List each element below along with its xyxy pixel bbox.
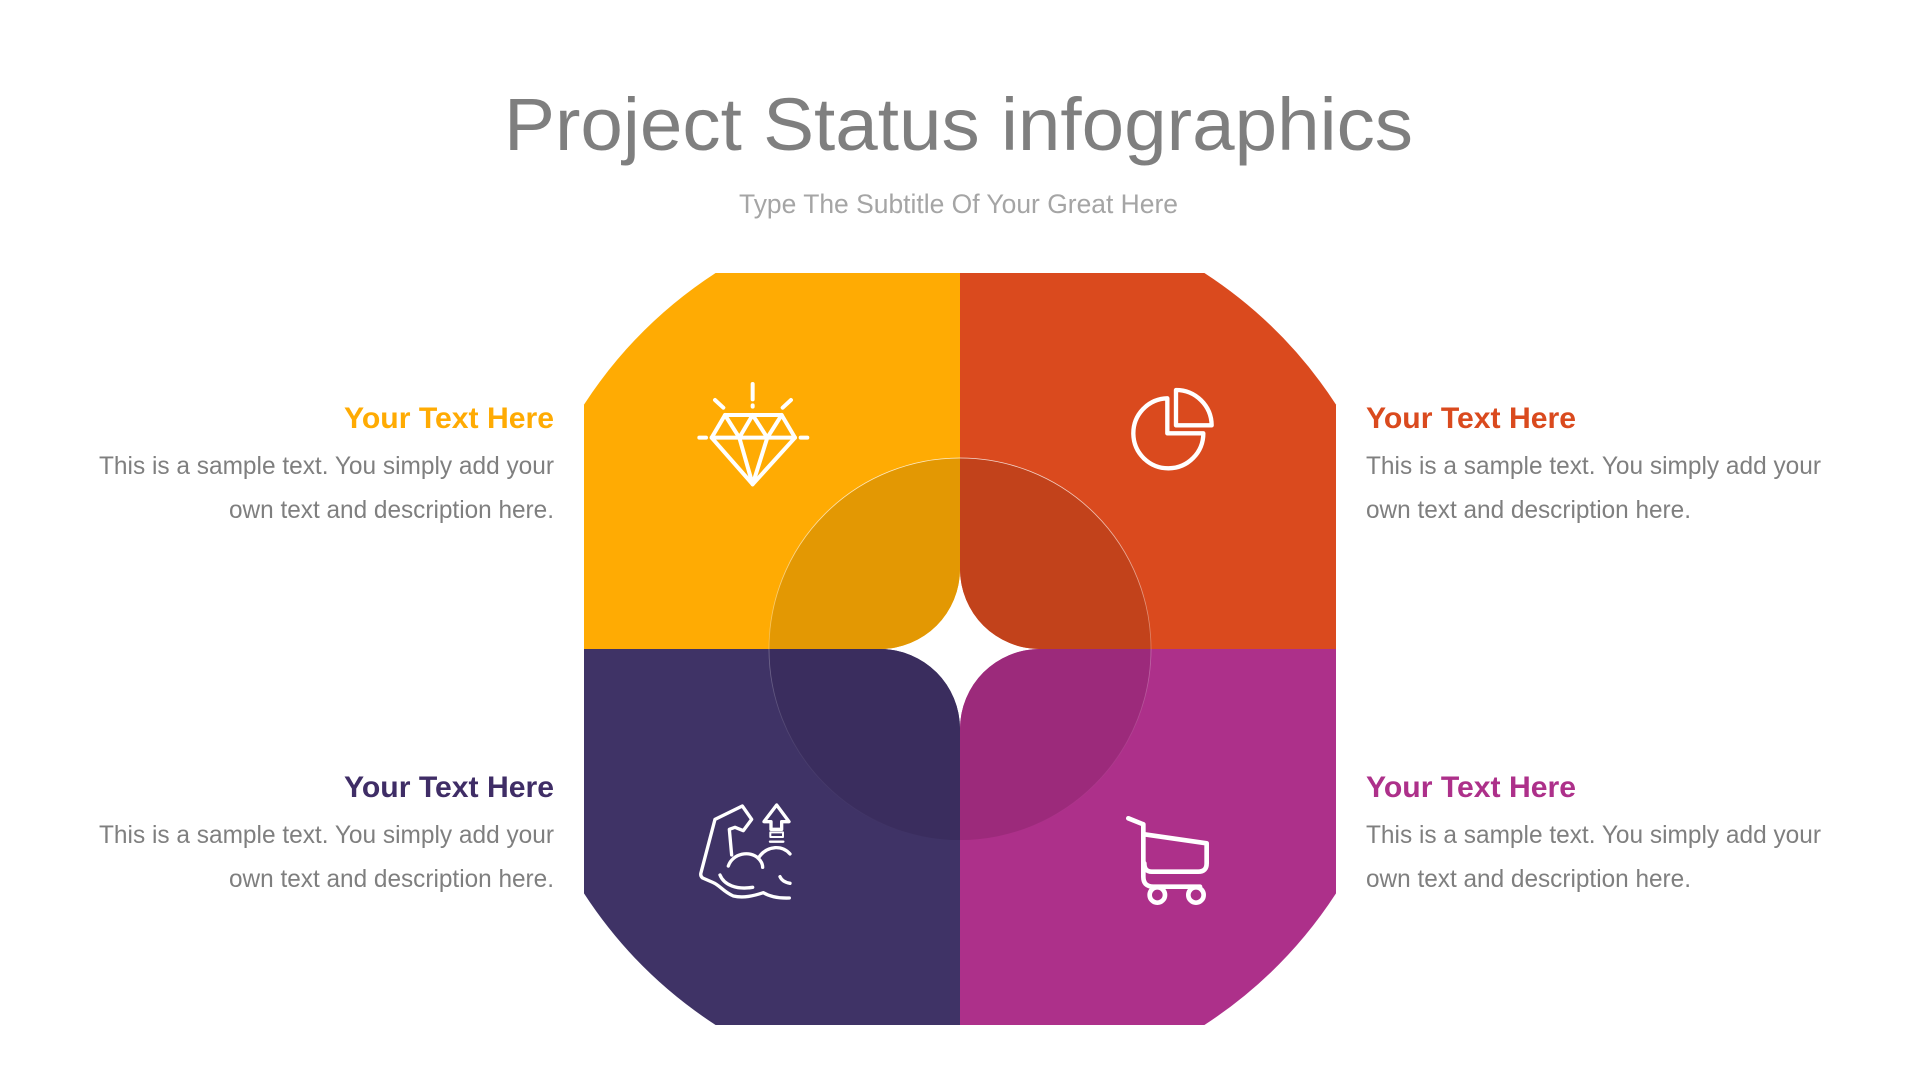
quadrant diagram <box>584 273 1336 1025</box>
title: Project Status infographics <box>504 83 1413 166</box>
circle rim <box>769 458 1151 840</box>
icon: muscle arm with up arrow <box>701 805 790 898</box>
text block: top right: own text and description here. <box>1366 496 1691 524</box>
text block: bottom left: Your Text Here <box>344 771 554 804</box>
icon: pie chart <box>1133 390 1212 468</box>
panel: magenta quadrant <box>960 649 1336 1025</box>
central translucent circle <box>769 458 1151 840</box>
panel: purple quadrant <box>584 649 960 1025</box>
text block: top right <box>1366 402 1821 524</box>
panel: orange quadrant <box>960 273 1336 649</box>
text block: top left: This is a sample text. You simply add your <box>99 452 554 480</box>
text block: top left: Your Text Here <box>344 402 554 435</box>
text block: bottom right <box>1366 771 1821 893</box>
text block: top right: This is a sample text. You simply add your <box>1366 452 1821 480</box>
text block: bottom right: own text and description here. <box>1366 865 1691 893</box>
icon: diamond <box>699 384 807 484</box>
infographic canvas <box>100 96 1821 1025</box>
text block: bottom right: Your Text Here <box>1366 771 1576 804</box>
panel: yellow quadrant <box>584 273 960 649</box>
text block: bottom left <box>99 771 554 893</box>
text block: bottom left: This is a sample text. You simply add your <box>99 821 554 849</box>
text block: top left: own text and description here. <box>229 496 554 524</box>
text block: bottom right: This is a sample text. You simply add your <box>1366 821 1821 849</box>
subtitle: Type The Subtitle Of Your Great Here <box>739 189 1178 219</box>
icon: shopping cart <box>1128 818 1207 903</box>
text block: top right: Your Text Here <box>1366 402 1576 435</box>
text block: bottom left: own text and description here. <box>229 865 554 893</box>
text block: top left <box>99 402 554 524</box>
